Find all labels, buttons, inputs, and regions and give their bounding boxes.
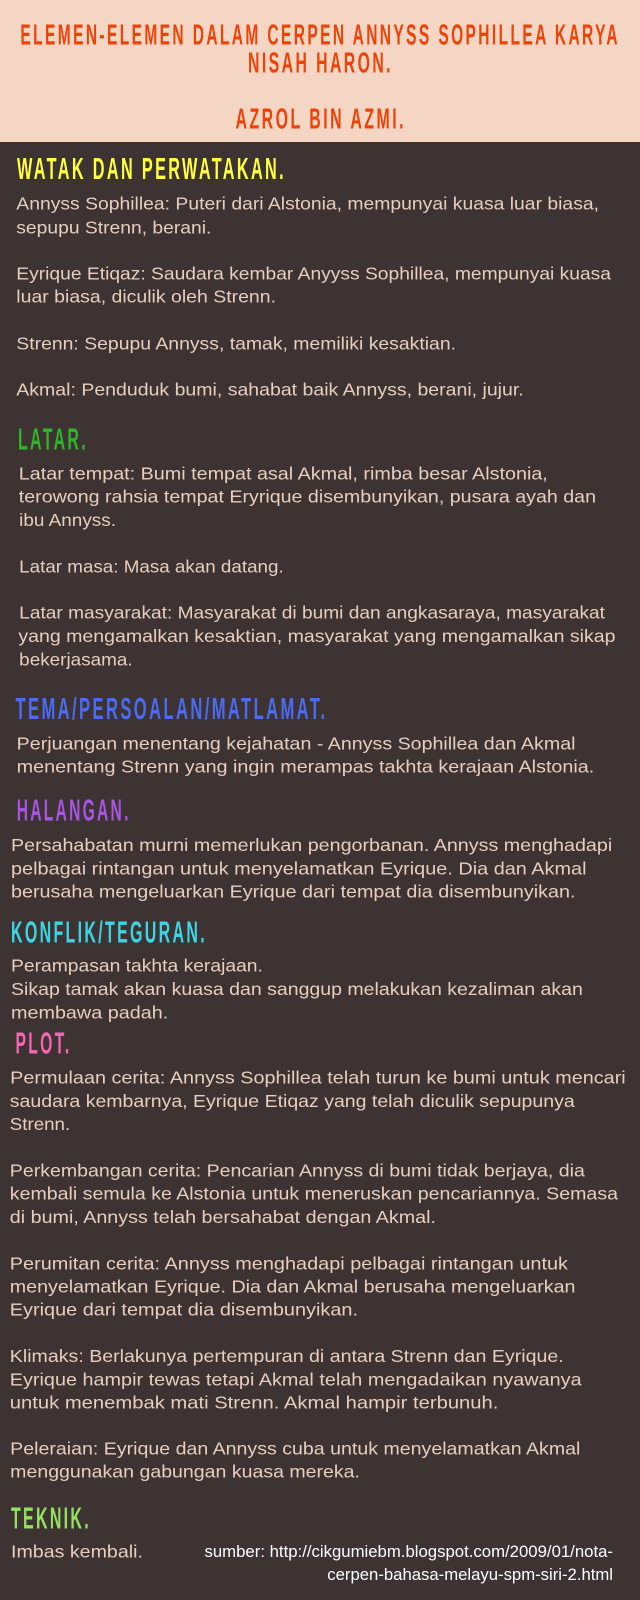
text: setting descriptions: terowong rahsia tempat Eryrique disembunyikan, pusara ayah dan xyxy=(19,487,596,507)
section: halangan xyxy=(11,793,612,902)
source credit: sumber: http://cikgumiebm.blogspot.com/2009/01/nota- xyxy=(204,1543,613,1561)
section: watak dan perwatakan xyxy=(16,151,611,400)
heading: konflik/teguran: KONFLIK/TEGURAN. xyxy=(11,914,207,949)
text: plot stages: Peleraian: Eyrique dan Annyss cuba untuk menyelamatkan Akmal xyxy=(10,1438,580,1458)
text: theme description: menentang Strenn yang ingin merampas takhta kerajaan Alstonia. xyxy=(17,756,594,776)
text: plot stages: di bumi, Annyss telah bersahabat dengan Akmal. xyxy=(10,1207,436,1227)
text: plot stages: kembali semula ke Alstonia untuk meneruskan pencariannya. Semasa xyxy=(10,1184,618,1204)
source credit xyxy=(204,1543,613,1584)
text: character descriptions: luar biasa, diculik oleh Strenn. xyxy=(16,287,276,307)
text: plot stages: saudara kembarnya, Eyrique Etiqaz yang telah diculik sepupunya xyxy=(10,1091,575,1111)
text: obstacle description: berusaha mengeluarkan Eyrique dari tempat dia disembunyikan. xyxy=(11,882,576,902)
text: character descriptions: Akmal: Penduduk bumi, sahabat baik Annyss, berani, jujur. xyxy=(16,380,524,400)
source credit: cerpen-bahasa-melayu-spm-siri-2.html xyxy=(327,1566,613,1584)
text: character descriptions: sepupu Strenn, berani. xyxy=(16,217,211,237)
heading: watak dan perwatakan: WATAK DAN PERWATAKAN. xyxy=(17,151,286,186)
heading: plot: PLOT. xyxy=(16,1026,72,1061)
text: character descriptions: Strenn: Sepupu Annyss, tamak, memiliki kesaktian. xyxy=(16,333,456,353)
text: plot stages: menyelamatkan Eyrique. Dia dan Akmal berusaha mengeluarkan xyxy=(10,1277,576,1297)
text: plot stages: Eyrique dari tempat dia disembunyikan. xyxy=(10,1300,358,1320)
text: setting descriptions xyxy=(18,463,615,669)
title xyxy=(20,19,620,135)
section: latar xyxy=(18,421,616,669)
text: setting descriptions: Latar tempat: Bumi tempat asal Akmal, rimba besar Alstonia, xyxy=(19,463,548,483)
text: setting descriptions: bekerjasama. xyxy=(19,649,133,669)
text: character descriptions xyxy=(16,194,611,400)
section: teknik xyxy=(11,1501,143,1562)
text: theme description: Perjuangan menentang kejahatan - Annyss Sophillea dan Akmal xyxy=(17,733,575,753)
panel: header xyxy=(0,0,640,142)
text: plot stages: Perkembangan cerita: Pencarian Annyss di bumi tidak berjaya, dia xyxy=(10,1161,585,1181)
section: plot xyxy=(10,1026,626,1482)
title: NISAH HARON. xyxy=(248,47,393,79)
heading: halangan: HALANGAN. xyxy=(17,793,131,828)
text: plot stages xyxy=(10,1068,626,1482)
text: technique: Imbas kembali. xyxy=(11,1542,143,1562)
section: konflik xyxy=(11,914,583,1022)
text: setting descriptions: Latar masyarakat: Masyarakat di bumi dan angkasaraya, masyarakat xyxy=(19,603,605,623)
text: theme description xyxy=(17,733,594,776)
heading: tema/persoalan/matlamat: TEMA/PERSOALAN/MATLAMAT. xyxy=(16,691,328,726)
text: conflict description: Sikap tamak akan kuasa dan sanggup melakukan kezaliman akan xyxy=(11,979,583,999)
heading: teknik: TEKNIK. xyxy=(11,1501,91,1536)
text: plot stages: menggunakan gabungan kuasa mereka. xyxy=(10,1462,360,1482)
text: plot stages: Perumitan cerita: Annyss menghadapi pelbagai rintangan untuk xyxy=(10,1253,568,1273)
text: character descriptions: Eyrique Etiqaz: Saudara kembar Anyyss Sophillea, mempunyai kuasa xyxy=(16,263,611,283)
title: AZROL BIN AZMI. xyxy=(236,103,406,135)
text: conflict description xyxy=(11,956,583,1022)
text: obstacle description: pelbagai rintangan untuk menyelamatkan Eyrique. Dia dan Akmal xyxy=(11,858,586,878)
text: conflict description: membawa padah. xyxy=(11,1002,168,1022)
text: setting descriptions: Latar masa: Masa akan datang. xyxy=(19,556,284,576)
text: setting descriptions: yang mengamalkan kesaktian, masyarakat yang mengamalkan sikap xyxy=(18,626,615,646)
text: plot stages: Klimaks: Berlakunya pertempuran di antara Strenn dan Eyrique. xyxy=(10,1346,564,1366)
text: obstacle description xyxy=(11,835,612,902)
text: character descriptions: Annyss Sophillea: Puteri dari Alstonia, mempunyai kuasa luar biasa, xyxy=(16,194,599,214)
text: plot stages: untuk menembak mati Strenn. Akmal hampir terbunuh. xyxy=(10,1392,498,1412)
text: obstacle description: Persahabatan murni memerlukan pengorbanan. Annyss menghadapi xyxy=(11,835,612,855)
text: plot stages: Eyrique hampir tewas tetapi Akmal telah mengadaikan nyawanya xyxy=(10,1369,582,1389)
text: conflict description: Perampasan takhta kerajaan. xyxy=(11,956,263,976)
heading: latar: LATAR. xyxy=(18,421,88,456)
text: setting descriptions: ibu Annyss. xyxy=(19,510,116,530)
text: plot stages: Strenn. xyxy=(10,1114,70,1134)
text: plot stages: Permulaan cerita: Annyss Sophillea telah turun ke bumi untuk mencari xyxy=(10,1068,626,1088)
section: tema xyxy=(16,691,594,776)
